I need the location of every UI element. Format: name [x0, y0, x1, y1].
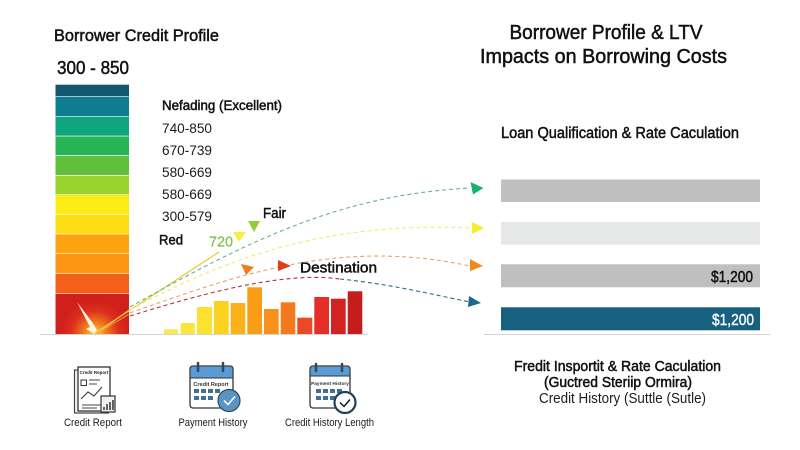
icon: credit history length calendar: [310, 364, 356, 413]
right baseline: [484, 334, 770, 335]
score range list: Nefading (Excellent): [162, 98, 282, 113]
score range list: 300-579: [162, 208, 212, 224]
caption: Payment History: Payment History: [178, 417, 248, 429]
icon: credit history length calendar: Payment History: [311, 381, 349, 387]
score pointer lines: [95, 252, 219, 335]
footnote block: Fredit Insportit & Rate Caculation: [514, 359, 721, 375]
score range list: 580-669: [162, 164, 212, 180]
dashed arrow: green tier: [130, 182, 484, 307]
score range list: [162, 98, 282, 224]
footnote block: Credit History (Suttle (Sutle): [539, 391, 706, 407]
score burst block: [56, 294, 129, 334]
main title: Impacts on Borrowing Costs: [480, 45, 727, 68]
dashed arrow: orange tier: [130, 256, 483, 313]
score 720: 720: [209, 234, 233, 250]
main title: Borrower Profile & LTV: [510, 21, 703, 44]
footnote block: (Guctred Steriip Ormira): [544, 375, 692, 391]
icon: credit report: Credit Report: [80, 370, 109, 375]
icon: payment history calendar: Credit Report: [193, 382, 229, 388]
dashed arrow: yellow tier: [130, 222, 484, 310]
label: Red: Red: [159, 232, 183, 248]
highlighted cost bar: [501, 307, 760, 330]
caption: Credit History Length: Credit History Length: [285, 417, 374, 429]
score pointer: [77, 302, 97, 334]
bar chart: [164, 287, 362, 334]
score range list: 580-669: [162, 186, 212, 202]
left heading: Borrower Credit Profile: [54, 27, 219, 45]
icon: credit report: [74, 367, 115, 413]
panel: cost bars: [501, 180, 760, 330]
highlighted cost bar: $1,200: [712, 312, 754, 329]
score range: 300 - 850: [57, 57, 129, 78]
tier markers: [233, 221, 291, 275]
icon: payment history calendar: [190, 363, 240, 412]
caption: Credit Report: Credit Report: [64, 417, 122, 429]
main title: [480, 21, 727, 68]
dashed arrow: red to teal tier: [130, 277, 481, 316]
footnote block: [514, 359, 721, 407]
right heading: Loan Qualification & Rate Caculation: [501, 125, 739, 142]
cost bar with value: $1,200: [711, 269, 753, 286]
cost bar with value: [501, 264, 760, 287]
score range list: 740-850: [162, 120, 212, 136]
label: Destination: Destination: [300, 260, 377, 276]
label: Fair: Fair: [263, 206, 286, 222]
score range list: 670-739: [162, 142, 212, 158]
credit score colour stack: [56, 85, 129, 334]
left baseline: [40, 334, 368, 335]
